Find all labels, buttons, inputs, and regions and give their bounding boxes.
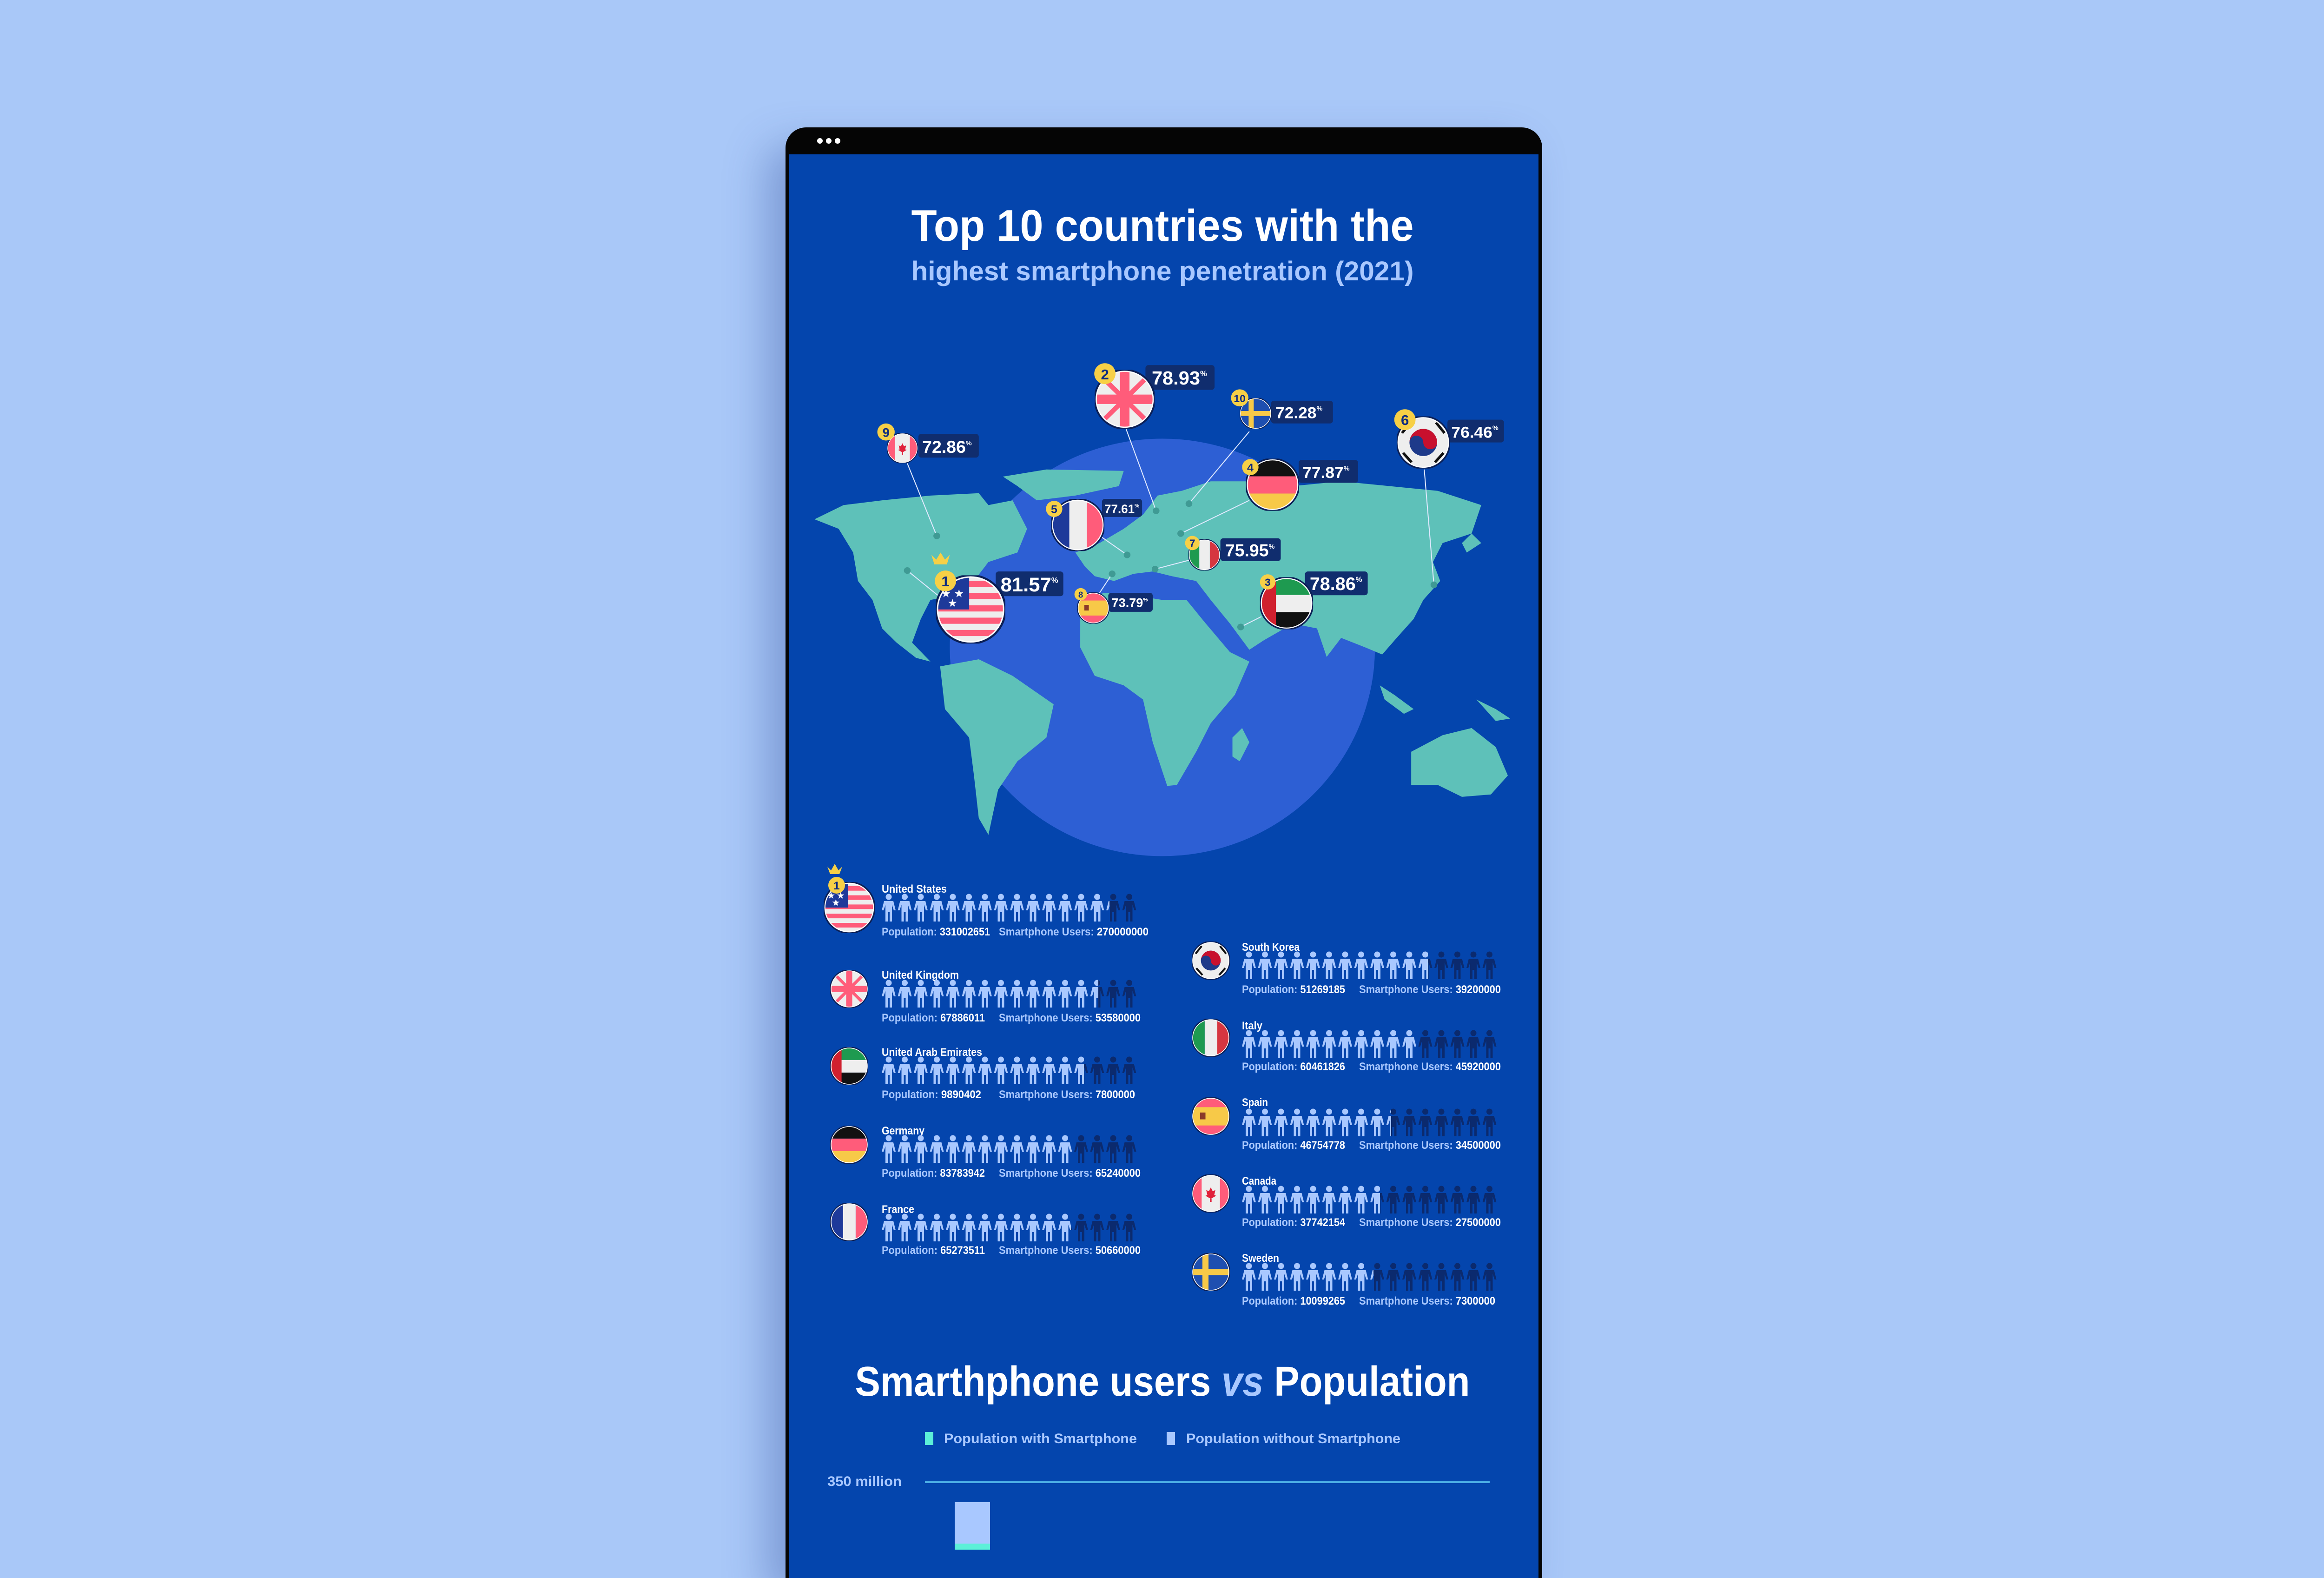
row: Germany (830, 1125, 1141, 1180)
row: United States: 1 (833, 880, 840, 892)
row: Italy: Smartphone Users: 45920000 (1359, 1061, 1501, 1073)
world map with markers: 2 (1101, 366, 1109, 383)
row: United Arab Emirates: Smartphone Users: 7800000 (999, 1088, 1135, 1101)
row: Sweden: Smartphone Users: 7300000 (1359, 1295, 1495, 1307)
world map with markers: 8 (1078, 590, 1083, 599)
world map with markers: % (1356, 576, 1362, 584)
row: United States: Smartphone Users: 270000000 (999, 926, 1149, 938)
row: Germany: Germany (882, 1125, 925, 1137)
icon: crown (931, 552, 950, 564)
chart heading: Smarthphone users vs Population (855, 1359, 1470, 1405)
country rows (824, 864, 1501, 1307)
title (911, 201, 1414, 286)
row: France: Smartphone Users: 50660000 (999, 1244, 1141, 1257)
world map with markers: 1 (941, 573, 950, 590)
world map with markers: 78.86 (1310, 574, 1356, 594)
row: Italy (1192, 1019, 1501, 1073)
row: United Arab Emirates: United Arab Emirates (882, 1046, 982, 1059)
title: highest smartphone penetration (2021) (911, 256, 1414, 286)
world map with markers (814, 363, 1510, 856)
world map with markers: % (1344, 465, 1350, 472)
chart legend: Population without Smartphone (1186, 1431, 1400, 1446)
row: United Arab Emirates: Population: 9890402 (882, 1088, 981, 1101)
world map with markers: % (1143, 597, 1148, 603)
row: United Kingdom: Population: 67886011 (882, 1012, 985, 1024)
row: Canada (1192, 1174, 1501, 1229)
row: South Korea: Smartphone Users: 39200000 (1359, 983, 1501, 996)
screen panel (789, 154, 1538, 1578)
row: Germany: Population: 83783942 (882, 1167, 985, 1180)
world map with markers: % (1492, 424, 1499, 432)
row: Spain: Spain (1242, 1096, 1268, 1109)
row: Canada: Canada (1242, 1175, 1277, 1187)
row: France: Population: 65273511 (882, 1244, 985, 1257)
world map with markers: % (966, 440, 972, 447)
row: Spain: Population: 46754778 (1242, 1139, 1345, 1152)
world map with markers: 3 (1265, 576, 1271, 588)
world map with markers: 72.28 (1275, 404, 1316, 422)
world map with markers: 75.95 (1225, 541, 1269, 560)
device frame (786, 127, 1542, 1578)
world map with markers: 9 (883, 426, 890, 439)
map flags (887, 370, 1450, 643)
continents (814, 470, 1510, 835)
row: France (830, 1203, 1141, 1257)
globe (950, 438, 1375, 856)
world map with markers: 4 (1247, 462, 1254, 474)
chart legend (925, 1431, 1400, 1446)
row: United States: Population: 331002651 (882, 926, 990, 938)
location dots (904, 500, 1437, 630)
rank badges (878, 363, 1416, 600)
world map with markers: 6 (1401, 412, 1409, 428)
world map with markers: 7 (1189, 537, 1195, 549)
connector lines (907, 429, 1434, 627)
row: United Kingdom: Smartphone Users: 53580000 (999, 1012, 1141, 1024)
row: United Arab Emirates (830, 1046, 1136, 1101)
world map with markers: 77.87 (1302, 464, 1344, 482)
chart legend: Population with Smartphone (944, 1431, 1137, 1446)
world map with markers: % (1051, 577, 1058, 585)
row: Sweden: Population: 10099265 (1242, 1295, 1345, 1307)
row: South Korea: Population: 51269185 (1242, 983, 1345, 996)
row: Italy: Population: 60461826 (1242, 1061, 1345, 1073)
row: Germany: Smartphone Users: 65240000 (999, 1167, 1141, 1180)
row: Sweden: Sweden (1242, 1252, 1279, 1265)
world map with markers: 72.86 (922, 437, 966, 457)
row: Canada: Population: 37742154 (1242, 1216, 1346, 1229)
world map with markers: % (1135, 504, 1139, 509)
world map with markers: 77.61 (1104, 503, 1135, 516)
world map with markers: 10 (1234, 392, 1246, 404)
row: Sweden (1192, 1252, 1497, 1307)
row: United Kingdom (830, 969, 1141, 1024)
world map with markers: % (1316, 405, 1323, 412)
row: Spain: Smartphone Users: 34500000 (1359, 1139, 1501, 1152)
row: Spain (1192, 1096, 1501, 1152)
world map with markers: 5 (1051, 504, 1057, 516)
bar chart: 350 million (827, 1474, 902, 1489)
row: United States (824, 864, 1149, 938)
row: France: France (882, 1203, 914, 1216)
world map with markers: 73.79 (1112, 596, 1143, 610)
world map with markers: 78.93 (1152, 367, 1200, 389)
title: Top 10 countries with the (911, 201, 1414, 251)
percent labels (918, 365, 1504, 612)
bar chart (827, 1474, 1490, 1553)
row: South Korea: South Korea (1242, 941, 1300, 954)
world map with markers: 76.46 (1451, 424, 1492, 441)
world map with markers: % (1200, 370, 1207, 378)
window dots (817, 138, 840, 144)
row: South Korea (1192, 941, 1501, 996)
world map with markers: % (1269, 543, 1275, 550)
row: Italy: Italy (1242, 1020, 1263, 1032)
row: Canada: Smartphone Users: 27500000 (1359, 1216, 1501, 1229)
row: United Kingdom: United Kingdom (882, 969, 959, 981)
world map with markers: 81.57 (1001, 574, 1051, 596)
row: United States: United States (882, 883, 947, 895)
